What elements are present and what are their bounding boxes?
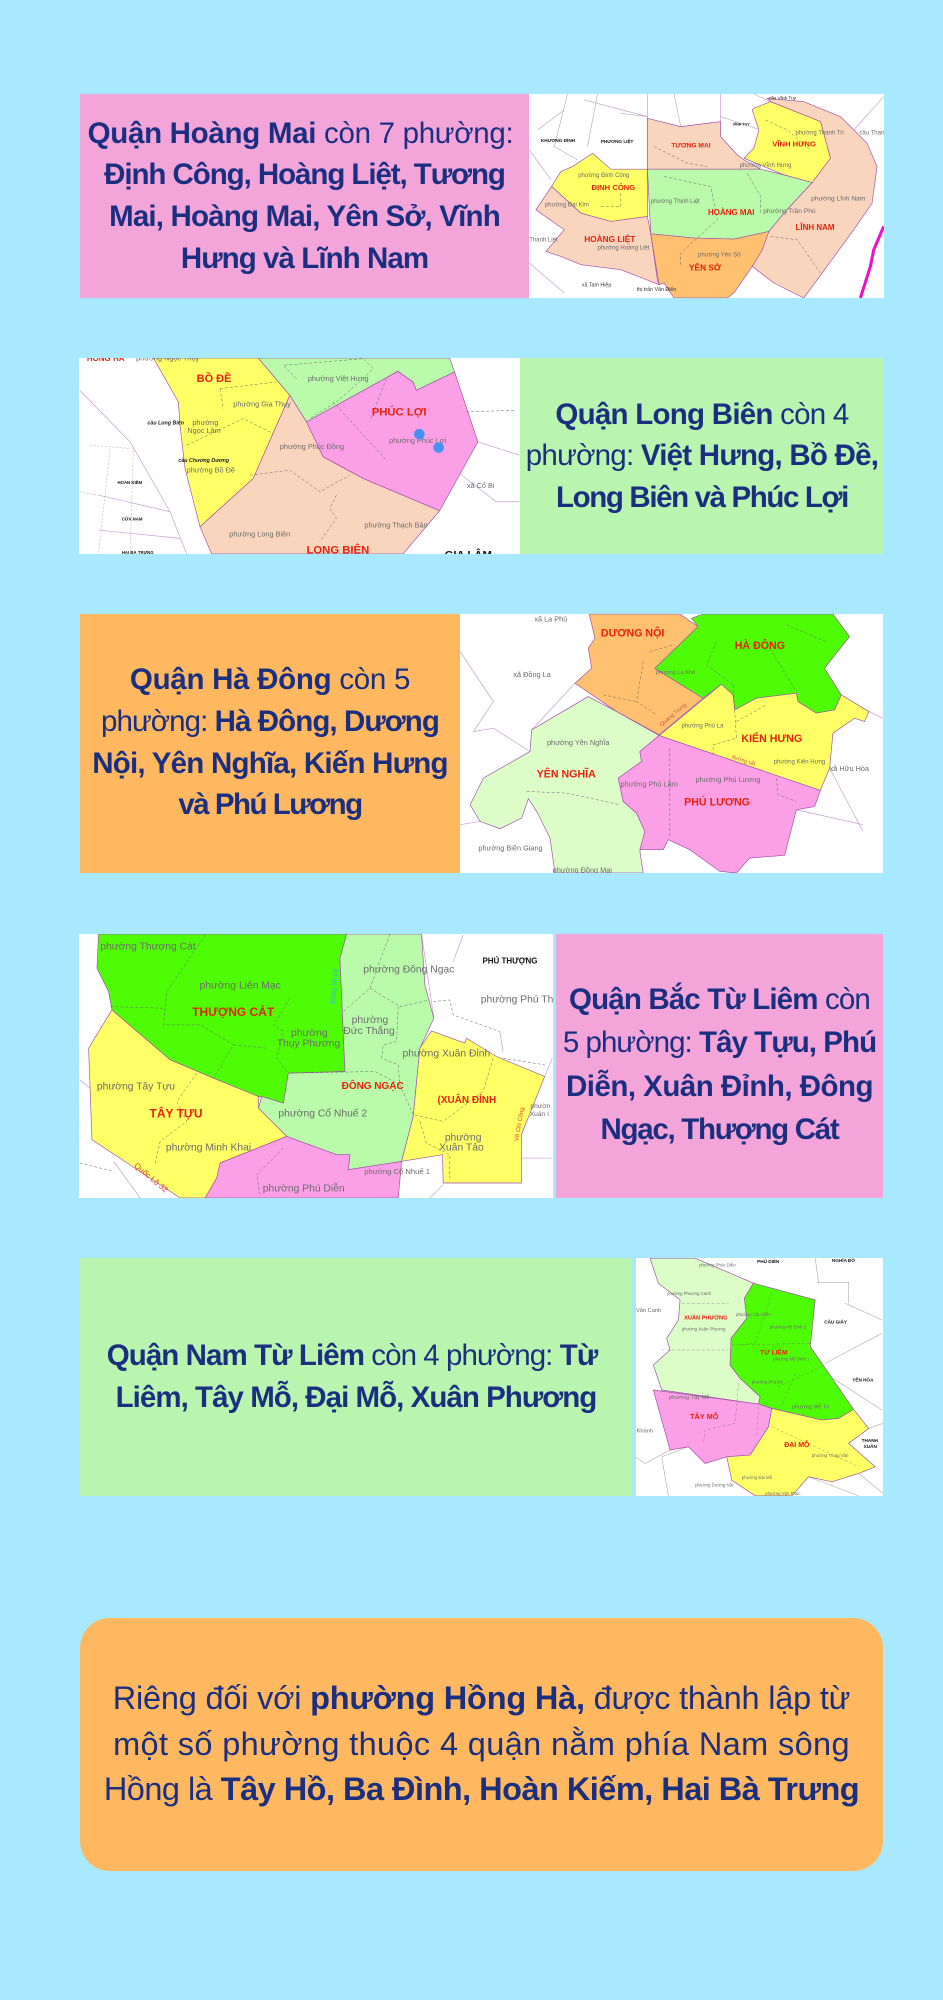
text: Hà Đông wards [92,663,448,821]
text: Hồng Hà note: Hồng là Tây Hồ, Ba Đình, Hoàn Kiếm, Hai Bà Trưng [104,1771,859,1807]
map: Long Biên: phường [192,418,218,427]
callout: phường Hồng Hà [80,1618,883,1871]
text: Long Biên wards [526,398,878,514]
map: Nam Từ Liêm [636,1258,883,1496]
map: Bắc Từ Liêm: phường Xuân Đỉnh [403,1048,490,1060]
map: Hà Đông: phường Phú Lâm [621,779,678,788]
map: Nam Từ Liêm: phường Tây Mỗ [669,1394,709,1401]
map: Hoàng Mai: ĐỊNH CÔNG [592,183,635,192]
map: Hoàng Mai: phường Trần Phú [763,206,816,215]
map: Hoàng Mai: phường Vĩnh Hưng [740,163,791,169]
map: Bắc Từ Liêm: phường Liên Mạc [199,981,281,992]
map: Long Biên: phường Phúc Đồng [280,442,344,451]
map: Bắc Từ Liêm: Sông Nhuệ [328,968,340,1005]
map: Bắc Từ Liêm [79,934,553,1198]
map: Long Biên: cầu Long Biên [147,421,185,427]
map: Hà Đông: KIẾN HƯNG [741,732,802,745]
panel: Bắc Từ Liêm text [556,934,883,1198]
map: Hoàng Mai: VĨNH TUY [733,121,750,126]
map: Nam Từ Liêm: phường Trung Văn [812,1453,849,1458]
map: Long Biên: PHÚC LỢI [372,406,427,419]
map: Bắc Từ Liêm: phường Phú Th [481,995,553,1006]
map: Nam Từ Liêm: Khánh [637,1428,653,1434]
map: Long Biên: CỬA NAM [122,516,143,521]
map: Hoàng Mai: HOÀNG MAI [708,208,754,217]
map: Bắc Từ Liêm: Võ Chí Công [514,1107,526,1142]
text: Hoàng Mai wards: Định Công, Hoàng Liệt, Tương [104,158,505,191]
map: Long Biên: phường Gia Thụy [233,400,291,409]
map: Nam Từ Liêm: phường Dương Nội [695,1482,733,1487]
map: Bắc Từ Liêm: phường [445,1132,482,1143]
map: Hoàng Mai: phường Hoàng Liệt [598,246,650,252]
map: Long Biên: cầu Chương Dương [178,458,230,464]
map: Bắc Từ Liêm: Quốc Lộ 32 [132,1161,170,1195]
panel: Nam Từ Liêm text [80,1258,632,1496]
map: Nam Từ Liêm: phường Phúc Diễn [699,1263,736,1268]
map: Hà Đông: phường La Khê [656,670,695,676]
map: Hà Đông: xã Đồng La [513,670,552,679]
text: Hồng Hà note [104,1680,859,1807]
text: Hoàng Mai wards [88,117,513,275]
map: Long Biên: Ngọc Lâm [187,426,221,435]
map: Hà Đông: xã Hữu Hòa [830,764,870,773]
map: Bắc Từ Liêm: phường Phú Diễn [263,1182,345,1195]
map: Hà Đông: YÊN NGHĨA [537,767,596,780]
map: Hà Đông: PHÚ LƯƠNG [684,796,750,809]
panel: Hà Đông text [80,614,460,873]
map: Nam Từ Liêm: TỪ LIÊM [760,1348,788,1357]
text: Nam Từ Liêm wards: Liêm, Tây Mỗ, Đại Mỗ, Xuân Phương [116,1381,596,1414]
map: Hoàng Mai: YÊN SỞ [689,262,722,273]
map: Nam Từ Liêm: YÊN HÒA [852,1376,874,1383]
map: Bắc Từ Liêm: phường Cổ Nhuế 2 [278,1107,367,1119]
text: Hà Đông wards: phường: Hà Đông, Dương [101,705,439,738]
panel: Hoàng Mai text [80,94,529,298]
map: Nam Từ Liêm: TÂY MỖ [690,1412,719,1421]
map: Hoàng Mai: PHƯƠNG LIỆT [601,137,634,144]
map: Nam Từ Liêm: phường Mỹ Đình 2 [770,1325,807,1330]
map: Bắc Từ Liêm: Đức Thắng [343,1024,395,1037]
map: Long Biên: phường Thạch Bàn [364,521,428,530]
map: Hà Đông: phường Phú La [681,724,724,730]
map: Long Biên: BỒ ĐỀ [197,372,231,385]
text: Long Biên wards: phường: Việt Hưng, Bồ Đề, [526,439,878,472]
map: Bắc Từ Liêm: Thụy Phương [277,1039,341,1050]
map: Bắc Từ Liêm: PHÚ THƯỢNG [482,956,537,965]
map: Nam Từ Liêm: phường Phương Canh [667,1291,712,1296]
map: Long Biên: phường Phúc Lợi [389,436,447,445]
map: Bắc Từ Liêm: phường Thượng Cát [100,942,196,953]
text: Hồng Hà note: Riêng đối với phường Hồng Hà, được thành lập từ [113,1680,850,1716]
map: Hà Đông: đường sắt [731,753,757,768]
map: Hoàng Mai: Thanh Liệt [529,237,558,243]
map: Hoàng Mai: TƯƠNG MAI [671,143,711,150]
map: Bắc Từ Liêm: THƯỢNG CÁT [192,1004,275,1019]
map: Hoàng Mai: phường Thịnh Liệt [651,199,700,205]
map: Long Biên: phường Việt Hưng [308,374,369,383]
map: Hà Đông: phường Kiến Hưng [774,759,825,765]
map: Hà Đông [460,614,883,873]
map: Long Biên: phường Bồ Đề [187,465,235,474]
map: Bắc Từ Liêm: ĐÔNG NGẠC [342,1080,404,1092]
map: Hà Đông: phường Phú Lương [695,775,760,784]
text: Hà Đông wards: Nội, Yên Nghĩa, Kiến Hưng [92,746,448,780]
map: Nam Từ Liêm: phường Cầu Diễn [736,1312,771,1317]
map: Hoàng Mai: HOÀNG LIỆT [584,233,635,244]
text: Long Biên wards: Long Biên và Phúc Lợi [556,481,848,514]
map: Bắc Từ Liêm: phường Minh Khai [166,1142,251,1153]
map: Nam Từ Liêm: phường Mễ Trì [792,1404,830,1411]
map: Hà Đông: phường Yên Nghĩa [547,738,610,747]
text: Bắc Từ Liêm wards: 5 phường: Tây Tựu, Phú [563,1026,876,1059]
map: Hoàng Mai: phường Định Công [578,173,629,179]
map: Nam Từ Liêm: ĐẠI MỖ [784,1440,810,1449]
map: Long Biên: phường Long Biên [229,529,290,538]
map: Nam Từ Liêm: PHÚ DIỄN [757,1258,780,1264]
panel: Long Biên text [520,358,884,554]
map: Nam Từ Liêm: phường Đại Mỗ [742,1475,773,1480]
map: Nam Từ Liêm: CẦU GIẤY [824,1319,848,1325]
text: Long Biên wards: Quận Long Biên còn 4 [555,398,849,431]
map: Hà Đông: Quang Trung [659,702,688,728]
map: Bắc Từ Liêm: Xuân Tảo [439,1143,484,1154]
map: Long Biên [79,358,520,554]
text: Bắc Từ Liêm wards: Quận Bắc Từ Liêm còn [569,983,870,1016]
text: Hoàng Mai wards: Quận Hoàng Mai còn 7 phường: [88,117,513,150]
text: Hà Đông wards: và Phú Lương [178,788,362,821]
map: Bắc Từ Liêm: phường Tây Tựu [97,1081,175,1092]
map: Bắc Từ Liêm: phường Đông Ngạc [363,965,454,976]
map: Hà Đông: phường Biên Giang [478,843,543,852]
text: Bắc Từ Liêm wards: Diễn, Xuân Đỉnh, Đông [566,1070,873,1102]
map: Hoàng Mai: thị trấn Văn Điển [637,286,676,293]
map: Hoàng Mai: xã Tam Hiệp [582,283,611,289]
map: Hà Đông: HÀ ĐÔNG [735,639,785,652]
map: Bắc Từ Liêm: Xuân I [530,1111,549,1118]
text: Hoàng Mai wards: Mai, Hoàng Mai, Yên Sở, Vĩnh [109,200,500,233]
map: Nam Từ Liêm: phường Mỹ Đình 1 [773,1356,810,1361]
map: Bắc Từ Liêm: TÂY TỰU [150,1105,202,1120]
map: Long Biên: HOÀN KIẾM [117,480,143,485]
map: Hoàng Mai: cầu Vĩnh Tuy [769,95,797,100]
map: Long Biên: xã Cổ Bi [467,481,495,490]
map: Hoàng Mai [529,94,884,298]
map: Nam Từ Liêm: phường Xuân Phương [682,1326,726,1331]
text: Hồng Hà note: một số phường thuộc 4 quận nằm phía Nam sông [113,1726,850,1762]
map: Nam Từ Liêm: phường Phú Đô [752,1380,783,1385]
map: Bắc Từ Liêm: phường Cổ Nhuế 1 [364,1167,430,1176]
text: Hoàng Mai wards: Hưng và Lĩnh Nam [181,242,428,275]
map: Hoàng Mai: phường Thanh Trì [796,131,844,137]
map: Nam Từ Liêm: XUÂN [864,1443,877,1449]
map: Hoàng Mai: KHƯƠNG ĐÌNH [541,136,576,143]
map: Hoàng Mai: LĨNH NAM [796,223,835,232]
map: Nam Từ Liêm: THANH [862,1438,879,1443]
map: Bắc Từ Liêm: phường [352,1015,388,1026]
map: Nam Từ Liêm: XUÂN PHƯƠNG [684,1315,728,1322]
map: Hoàng Mai: phường Yên Sở [698,251,741,258]
text: Nam Từ Liêm wards [107,1339,598,1414]
text: Hà Đông wards: Quận Hà Đông còn 5 [130,663,410,696]
map: Hà Đông: DƯƠNG NỘI [601,627,664,640]
text: Bắc Từ Liêm wards [563,982,876,1146]
text: Nam Từ Liêm wards: Quận Nam Từ Liêm còn 4 phường: Từ [107,1339,597,1372]
map: Bắc Từ Liêm: phường [291,1028,328,1039]
map: Bắc Từ Liêm: (XUÂN ĐỈNH [438,1094,496,1106]
map: Hà Đông: xã La Phù [534,614,567,623]
map: Bắc Từ Liêm: phườn [530,1103,551,1110]
text: Bắc Từ Liêm wards: Ngạc, Thượng Cát [601,1113,838,1146]
map: Hoàng Mai: VĨNH HƯNG [772,140,816,149]
map: Hoàng Mai: phường Lĩnh Nam [811,195,866,202]
map: Hoàng Mai: phường Đại Kim [545,202,589,208]
map: Nam Từ Liêm: Vân Canh [636,1308,661,1314]
